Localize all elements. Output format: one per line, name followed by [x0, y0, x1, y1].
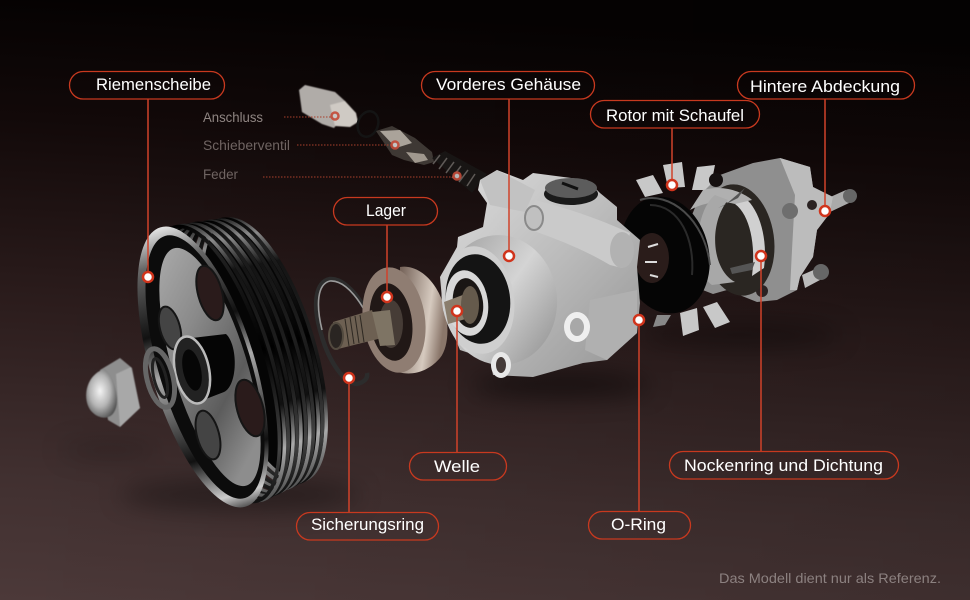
label: Anschluss: Anschluss	[203, 110, 263, 125]
port fitting	[299, 85, 358, 128]
minor markers	[332, 112, 460, 180]
upper boss	[480, 170, 535, 212]
pulley	[111, 205, 352, 522]
bearing body	[398, 267, 447, 373]
rear cover	[682, 158, 857, 302]
cam ring	[695, 180, 781, 300]
drop shadows	[60, 323, 840, 511]
label: Nockenring und Dichtung: Nockenring und Dichtung	[684, 456, 883, 475]
splined shaft	[444, 293, 476, 324]
bearing bore	[435, 242, 521, 358]
pulley face	[138, 238, 282, 496]
label: Welle: Welle	[434, 457, 480, 476]
valve	[376, 126, 434, 165]
minor labels	[203, 110, 290, 182]
spool valve parts	[299, 85, 487, 193]
feed tube	[525, 200, 630, 268]
leader lines	[148, 99, 825, 512]
side block	[585, 290, 637, 360]
cover plate	[682, 158, 833, 302]
black cap	[544, 183, 598, 205]
label: Sicherungsring: Sicherungsring	[311, 515, 424, 534]
washer	[140, 346, 180, 410]
outer rim	[111, 212, 295, 522]
O-ring gasket	[610, 188, 720, 322]
label: Feder: Feder	[203, 167, 238, 182]
callout labels	[96, 75, 900, 534]
icon: cap nut	[86, 358, 140, 427]
label: Vorderes Gehäuse: Vorderes Gehäuse	[436, 75, 581, 94]
label: Lager: Lager	[366, 201, 406, 220]
spring	[432, 151, 487, 193]
housing body	[440, 170, 640, 377]
label: O-Ring: O-Ring	[611, 515, 666, 534]
label: Schieberventil: Schieberventil	[203, 138, 290, 153]
callout pills	[70, 72, 914, 540]
bearing and shaft	[329, 263, 447, 377]
threaded shaft	[333, 310, 382, 349]
bearing face	[356, 263, 432, 377]
label: Riemenscheibe: Riemenscheibe	[96, 75, 211, 94]
lightening holes	[155, 263, 270, 462]
front dome	[437, 229, 563, 371]
grooved body	[126, 205, 352, 515]
label: Rotor mit Schaufel: Rotor mit Schaufel	[606, 106, 744, 125]
callout markers	[143, 180, 830, 383]
boss ring	[525, 206, 543, 230]
front housing	[435, 170, 640, 378]
hub	[192, 334, 235, 402]
dotted leaders	[263, 117, 454, 177]
rotor vanes	[636, 162, 730, 336]
o-ring small	[354, 108, 382, 140]
bolts	[828, 190, 849, 212]
mounting lugs	[564, 312, 590, 342]
label: Hintere Abdeckung: Hintere Abdeckung	[750, 77, 900, 96]
footnote: Das Modell dient nur als Referenz.	[719, 570, 941, 586]
snap ring	[316, 279, 378, 384]
